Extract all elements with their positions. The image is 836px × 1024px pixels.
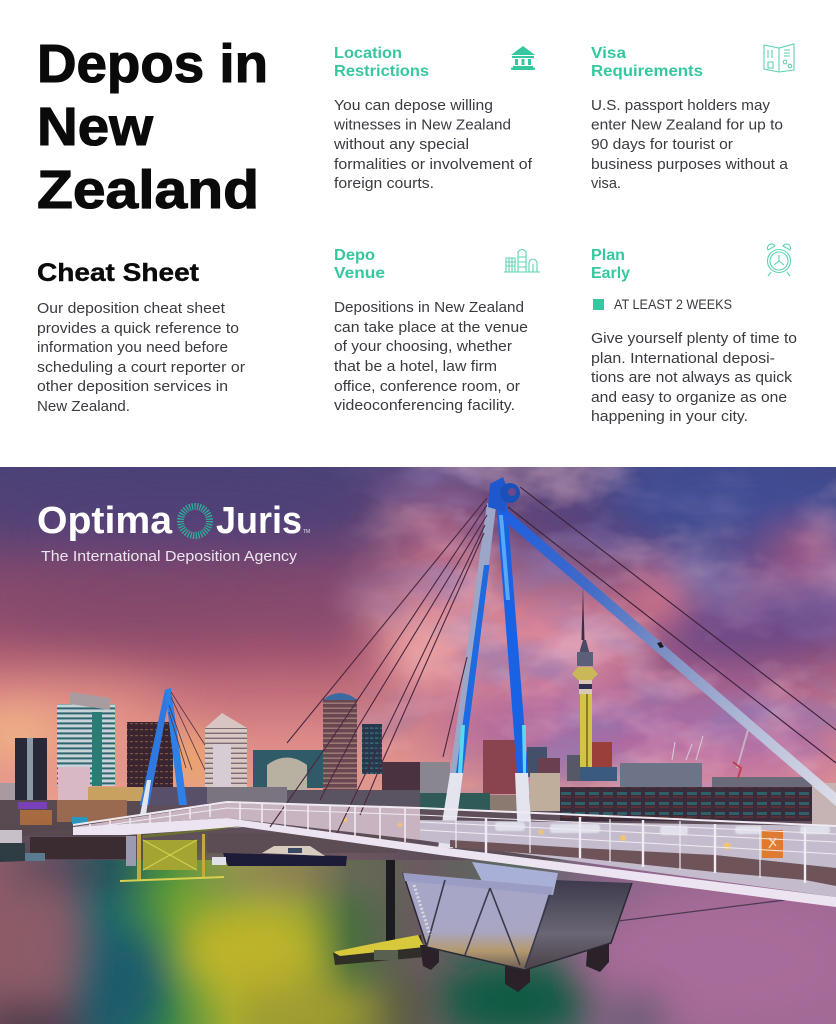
sky tower xyxy=(572,587,598,767)
heading: cheat sheet: Cheat Sheet xyxy=(37,259,200,287)
heading: depo venue: Venue xyxy=(334,265,385,282)
yellow pontoon xyxy=(333,935,425,965)
tower: mid-rise block xyxy=(253,750,323,788)
heading: plan early: Early xyxy=(591,265,630,282)
text block: depo venue: can take place at the venue xyxy=(334,320,528,336)
heading: depo venue: Depo xyxy=(334,247,375,264)
panel: depo venue xyxy=(334,247,540,414)
heading: visa requirements xyxy=(591,45,703,80)
text block: location restrictions: formalities or involvement of xyxy=(334,157,533,173)
far dock xyxy=(0,830,397,862)
main pylon xyxy=(438,477,836,848)
logo tagline: The International Deposition Agency xyxy=(41,549,298,565)
boat xyxy=(212,846,347,866)
text block: cheat sheet intro: scheduling a court reporter or xyxy=(37,360,245,376)
text block: cheat sheet intro: provides a quick reference to xyxy=(37,321,239,337)
logo wordmark: juris: Juris xyxy=(216,500,302,542)
tower: dark maroon xyxy=(127,722,173,788)
label: at least 2 weeks: AT LEAST 2 WEEKS xyxy=(614,296,732,312)
text block: visa requirements: 90 days for tourist or xyxy=(591,137,733,153)
text block: plan early: and easy to organize as one xyxy=(591,390,787,406)
panel: visa requirements xyxy=(591,44,794,192)
text block: visa requirements: U.S. passport holders may xyxy=(591,98,771,114)
orange pedestrian sign xyxy=(762,830,783,858)
text block: cheat sheet intro: New Zealand. xyxy=(37,399,130,415)
text block: visa requirements: business purposes without a xyxy=(591,157,789,173)
tower: dark navy xyxy=(15,738,47,800)
panel: plan early xyxy=(591,244,797,425)
deck lights xyxy=(343,818,730,850)
brown walkway strip xyxy=(450,840,836,886)
title: Depos in xyxy=(37,34,268,94)
text block: depo venue: videoconferencing facility. xyxy=(334,398,515,414)
text block: visa requirements: visa. xyxy=(591,176,621,192)
icon: city skyline xyxy=(504,250,540,272)
heading: plan early xyxy=(591,247,630,282)
heading: depo venue xyxy=(334,247,385,282)
text block: cheat sheet intro: Our deposition cheat sheet xyxy=(37,301,225,317)
mooring post xyxy=(386,860,395,942)
water xyxy=(0,859,836,1024)
left walkway surface xyxy=(73,803,420,840)
small far pylon xyxy=(140,688,205,815)
logo wordmark: optima: Optima xyxy=(37,500,173,542)
text block: depo venue: office, conference room, or xyxy=(334,379,520,395)
icon: open passport xyxy=(764,44,794,72)
city backing band xyxy=(22,801,812,860)
heading: plan early: Plan xyxy=(591,247,625,264)
tower: teal glass xyxy=(57,692,115,800)
railing xyxy=(73,802,836,883)
heading: location restrictions: Restrictions xyxy=(334,63,429,80)
text block: location restrictions: You can depose willing xyxy=(334,98,493,114)
sky xyxy=(0,450,836,807)
text block: location restrictions xyxy=(333,98,533,192)
logo xyxy=(37,500,310,565)
text block: location restrictions: foreign courts. xyxy=(334,176,434,192)
title xyxy=(37,34,268,220)
tower: white dome xyxy=(267,758,307,790)
text block: depo venue: of your choosing, whether xyxy=(334,339,512,355)
icon: courthouse xyxy=(511,46,535,70)
skyline xyxy=(0,692,836,836)
suspension cables xyxy=(270,487,836,833)
tower: round brown xyxy=(323,693,357,794)
text block: plan early: tions are not always as quick xyxy=(591,370,793,386)
mooring chain xyxy=(618,900,785,921)
heading: location restrictions xyxy=(334,45,429,80)
tower: beige xyxy=(205,713,247,788)
pylon left leg xyxy=(438,503,496,848)
bridge pier xyxy=(403,862,632,970)
text block: depo venue xyxy=(334,300,528,414)
text block: plan early: happening in your city. xyxy=(591,409,748,425)
deck road surface xyxy=(420,820,836,897)
pylon head and wheel xyxy=(488,477,520,512)
yellow underside xyxy=(143,826,243,838)
construction cranes xyxy=(672,730,748,778)
small pier frame xyxy=(120,832,224,882)
text block: location restrictions: witnesses in New Zealand xyxy=(333,118,511,134)
heading: visa requirements: Visa xyxy=(591,45,626,62)
text block: cheat sheet intro: other deposition services in xyxy=(37,379,228,395)
pier legs xyxy=(420,940,609,992)
bridge deck xyxy=(73,803,836,907)
tower: teal slab xyxy=(362,724,382,774)
icon: alarm clock xyxy=(767,244,791,276)
wharf buildings xyxy=(0,740,836,825)
logo ring xyxy=(180,506,210,536)
text block: cheat sheet intro: information you need before xyxy=(37,340,228,356)
text block: visa requirements xyxy=(591,98,789,192)
text block: location restrictions: without any special xyxy=(333,137,469,153)
heading: visa requirements: Requirements xyxy=(591,63,703,80)
deck fascia xyxy=(73,818,836,907)
text block: depo venue: that be a hotel, law firm xyxy=(334,359,497,375)
text block: visa requirements: enter New Zealand for up to xyxy=(591,118,783,134)
title: New xyxy=(37,97,154,157)
parked cars behind railing xyxy=(495,822,830,835)
page background xyxy=(0,0,836,467)
heading: location restrictions: Location xyxy=(334,45,402,62)
title: Zealand xyxy=(37,160,259,220)
text block: depo venue: Depositions in New Zealand xyxy=(334,300,524,316)
marker: green square xyxy=(593,299,604,310)
text block: plan early: plan. International deposi- xyxy=(591,351,775,367)
text block: cheat sheet intro xyxy=(37,301,245,415)
photo: Auckland harbour bridge at sunset xyxy=(0,450,836,1024)
text block: plan early: Give yourself plenty of time to xyxy=(591,331,797,347)
text block: plan early xyxy=(591,331,797,425)
pylon right leg xyxy=(497,505,532,840)
panel: location restrictions xyxy=(333,45,535,192)
pylon back arm xyxy=(503,508,836,806)
ground level city lights xyxy=(0,787,420,836)
logo trademark: TM xyxy=(303,529,310,535)
